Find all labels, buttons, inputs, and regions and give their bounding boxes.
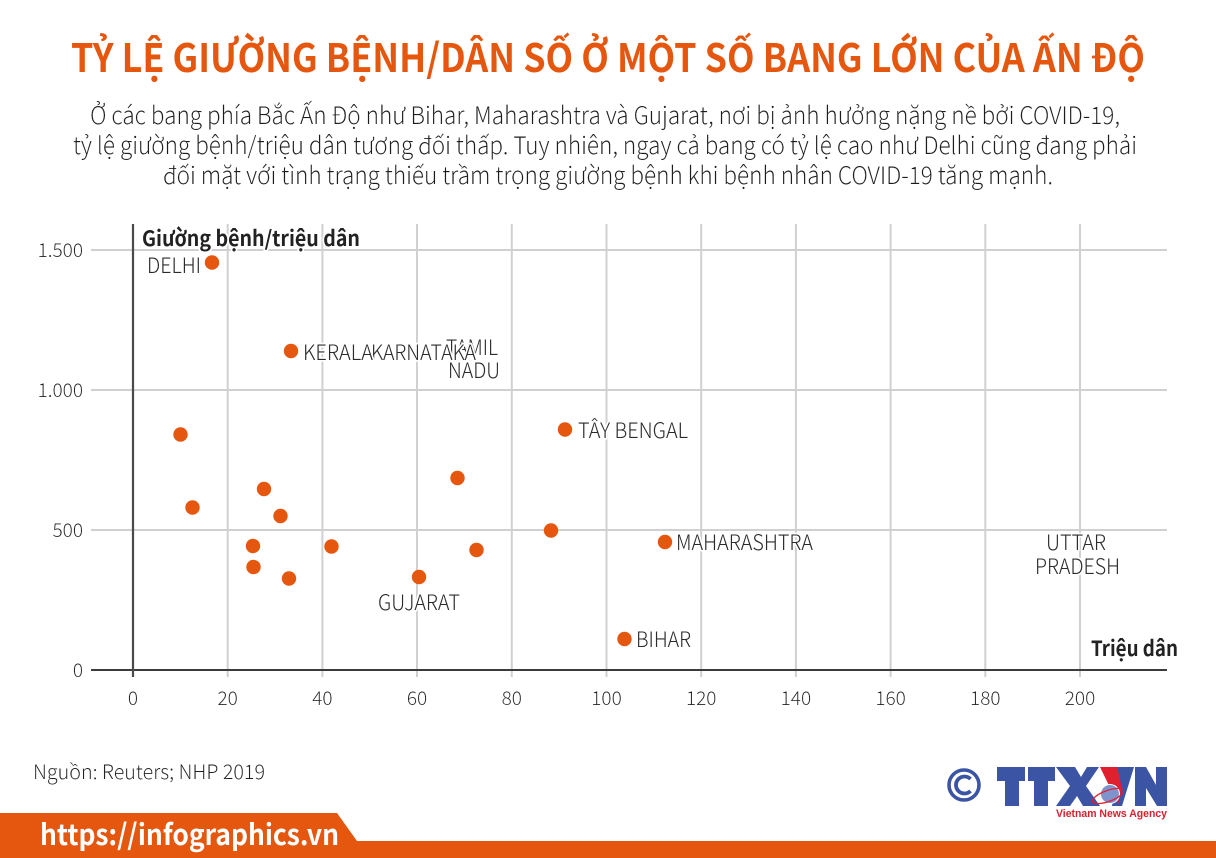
data labels: PRADESH — [1035, 551, 1120, 581]
x axis labels: 80 — [502, 684, 522, 711]
y axis title: Giường bệnh/triệu dân — [142, 223, 360, 253]
data points — [173, 255, 672, 646]
data labels — [147, 250, 1120, 654]
x axis labels: 20 — [218, 684, 238, 711]
data labels: BIHAR — [636, 624, 691, 654]
intro text: đối mặt với tình trạng thiếu trầm trọng giường bệnh khi bệnh nhân COVID-19 tăng mạnh. — [163, 156, 1053, 191]
y axis labels: 0 — [73, 656, 83, 683]
x axis labels — [128, 684, 1095, 711]
data labels: KARNATAKA — [371, 337, 477, 367]
logo caption: Vietnam News Agency — [1056, 808, 1168, 820]
x axis labels: 120 — [686, 684, 716, 711]
x axis labels: 0 — [128, 684, 138, 711]
grid lines — [91, 224, 1167, 677]
intro text: tỷ lệ giường bệnh/triệu dân tương đối thấp. Tuy nhiên, ngay cả bang có tỷ lệ cao như Delhi cũng đang phải — [73, 126, 1137, 161]
data labels: TÂY BENGAL — [578, 415, 688, 445]
x axis — [91, 669, 1167, 671]
x axis labels: 100 — [591, 684, 622, 711]
x axis labels: 200 — [1065, 684, 1095, 711]
x axis title: Triệu dân — [1091, 633, 1178, 663]
y axis labels: 1.500 — [38, 236, 83, 263]
footer banner — [0, 812, 1216, 858]
logo letters — [997, 767, 1167, 807]
data labels: DELHI — [147, 250, 201, 280]
x axis labels: 140 — [781, 684, 811, 711]
title: TỶ LỆ GIƯỜNG BỆNH/DÂN SỐ Ở MỘT SỐ BANG LỚN CỦA ẤN ĐỘ — [71, 28, 1145, 84]
intro text: Ở các bang phía Bắc Ấn Độ như Bihar, Maharashtra và Gujarat, nơi bị ảnh hưởng nặng nề bởi COVID-19, — [90, 96, 1120, 131]
data labels: NADU — [448, 355, 500, 385]
data labels: MAHARASHTRA — [676, 527, 814, 557]
globe — [1100, 784, 1120, 804]
data labels: GUJARAT — [378, 587, 460, 617]
data labels: KERALA — [303, 337, 374, 367]
data labels: UTTAR — [1046, 527, 1106, 557]
y axis — [132, 224, 134, 677]
intro text — [73, 96, 1137, 191]
icon: copyright — [949, 770, 979, 800]
x axis labels: 60 — [407, 684, 427, 711]
logo: TTXVN — [949, 767, 1168, 820]
source note: Nguồn: Reuters; NHP 2019 — [33, 756, 265, 785]
x axis labels: 160 — [875, 684, 906, 711]
scatter chart — [38, 223, 1178, 711]
y axis labels — [38, 236, 83, 683]
footer url: https://infographics.vn — [40, 812, 339, 854]
y axis labels: 1.000 — [38, 376, 83, 403]
x axis labels: 180 — [970, 684, 1001, 711]
data labels: TAMIL — [446, 332, 498, 362]
x axis labels: 40 — [312, 684, 333, 711]
y axis labels: 500 — [52, 516, 83, 543]
